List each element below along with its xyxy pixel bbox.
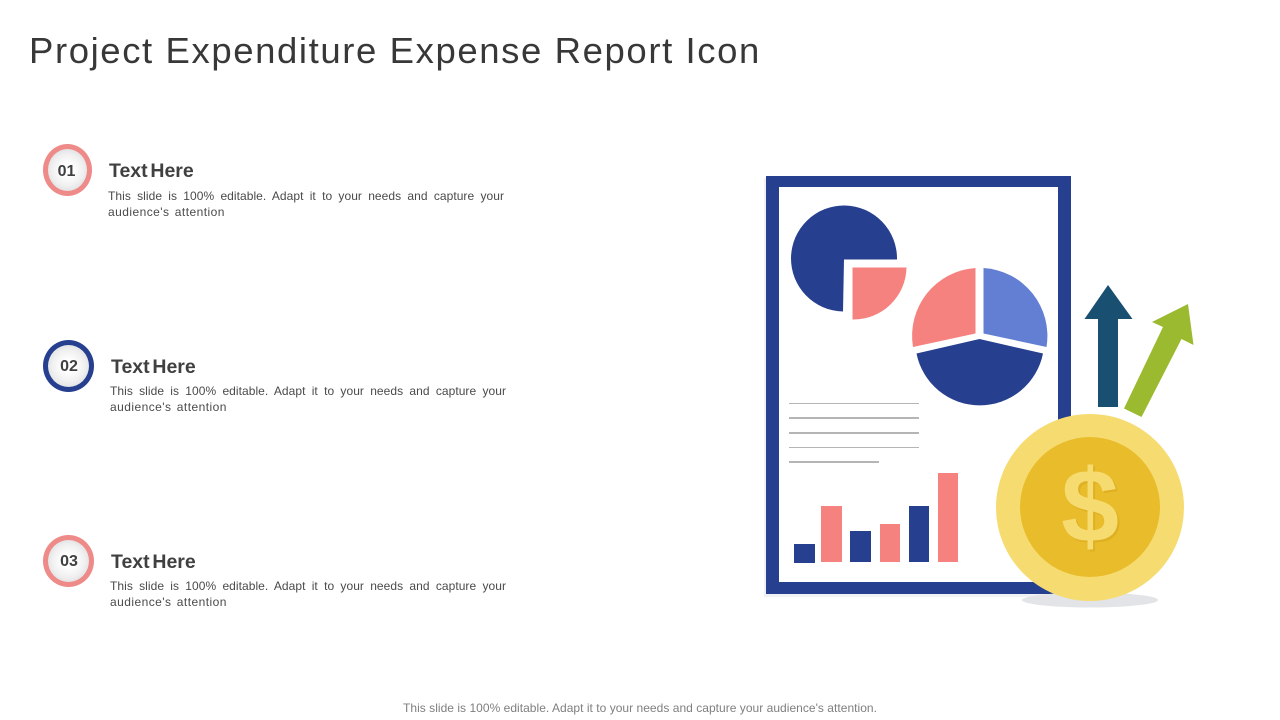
item 01 [43, 144, 504, 219]
footer note: This slide is 100% editable. Adapt it to your needs and capture your audience's attention. [403, 701, 877, 715]
description 03 [110, 579, 506, 609]
description 02: This slide is 100% editable. Adapt it to your needs and capture your [110, 384, 506, 398]
description 01 [108, 189, 504, 219]
pie chart: quarter split [791, 206, 906, 320]
arrow: navy up [1084, 285, 1132, 407]
item 03 [43, 535, 506, 609]
badge 01: 01 [58, 163, 75, 180]
badge 02 [43, 340, 94, 392]
pie chart: three segments [912, 268, 1047, 405]
bar chart [794, 473, 958, 563]
heading 01: Text Here [109, 160, 194, 182]
description 03: This slide is 100% editable. Adapt it to your needs and capture your [110, 579, 506, 593]
description 02: audience's attention [110, 400, 227, 414]
icon: dollar coin: $ [1061, 449, 1119, 565]
item 02 [43, 340, 506, 414]
icon: dollar coin: $ [1063, 451, 1121, 567]
badge 03 [43, 535, 94, 587]
description 03: audience's attention [110, 595, 227, 609]
badge 03: 03 [60, 553, 78, 570]
document page [764, 176, 1071, 597]
heading 02: Text Here [111, 356, 196, 378]
badge 01 [43, 144, 92, 196]
description 01: This slide is 100% editable. Adapt it to your needs and capture your [108, 189, 504, 203]
icon: dollar coin [996, 414, 1184, 608]
title: Project Expenditure Expense Report Icon [29, 30, 761, 71]
badge 02: 02 [60, 358, 78, 375]
description 02 [110, 384, 506, 414]
description 01: audience's attention [108, 205, 225, 219]
text lines [789, 404, 919, 462]
heading 03: Text Here [111, 551, 196, 573]
arrow: green diagonal [1124, 304, 1194, 417]
